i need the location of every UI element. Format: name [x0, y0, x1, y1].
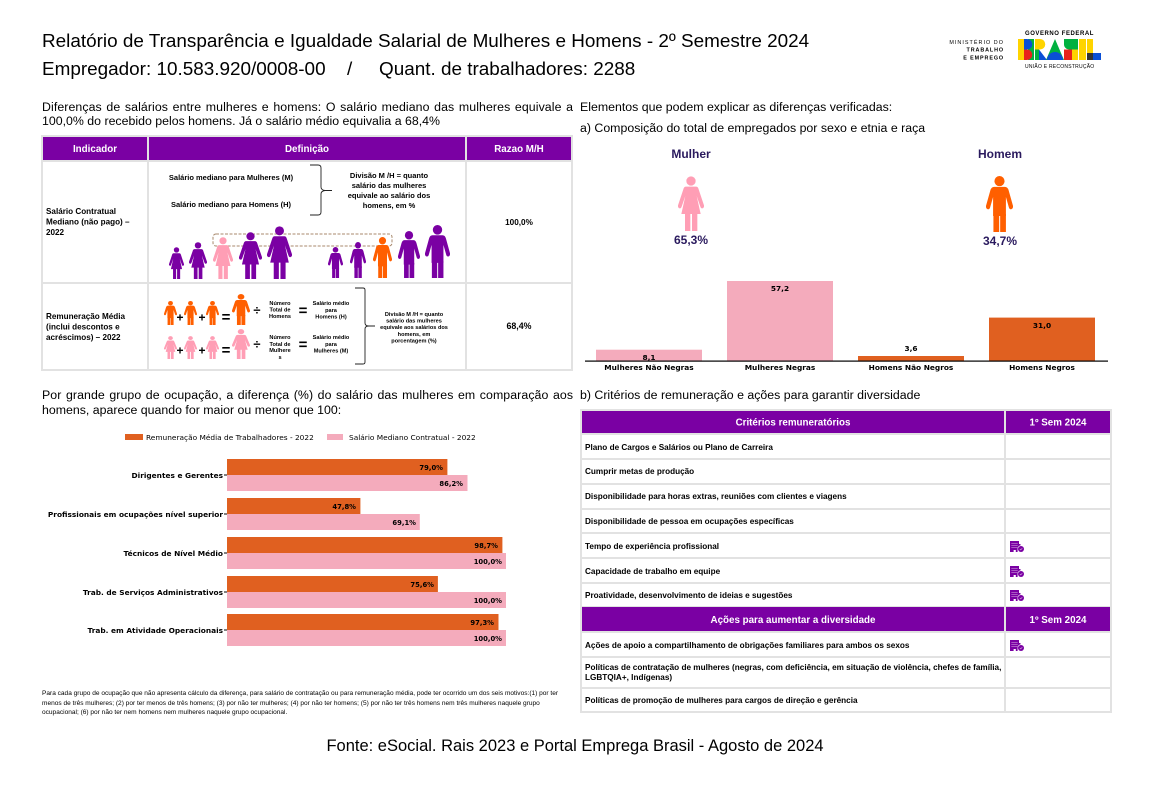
definition: salário mediano: homens, em % [363, 201, 416, 210]
bars: Atividade Operacionais [88, 614, 506, 646]
definition: divisão M/H média: homens, em [398, 332, 430, 338]
text block: elementos explicativos [580, 100, 925, 135]
panel: tabela de indicadores [41, 135, 573, 371]
row label: remuneração média: Remuneração Média [46, 312, 126, 321]
panel: tabela de critérios: Tempo de experiência profissional [585, 542, 719, 551]
definition: salário mediano: Salário mediano para Homens (H) [171, 200, 292, 209]
panel: tabela de critérios: Ações para aumentar a diversidade [710, 615, 876, 626]
bar chart: composição: 31,0 [1033, 321, 1051, 330]
formula: remuneração média mulheres: Salário médio [313, 335, 350, 341]
bars: Profissionais: Profissionais em ocupações nível superior [48, 510, 223, 519]
text block: elementos explicativos: Elementos que podem explicar as diferenças verificadas: [580, 100, 892, 114]
logo: Governo Federal Brasil: UNIÃO E RECONSTRUÇÃO [1025, 63, 1094, 70]
logo: Governo Federal Brasil: GOVERNO FEDERAL [1025, 31, 1094, 37]
bars: Atividade Operacionais: 100,0% [474, 635, 502, 643]
title: Empregador: 10.583.920/0008-00 [42, 59, 326, 80]
formula: remuneração média homens [164, 294, 350, 326]
value: razão média: 68,4% [507, 321, 532, 331]
formula: remuneração média homens: Salário médio [313, 301, 350, 307]
bar chart: composição: Mulheres Não Negras [604, 363, 694, 372]
panel: tabela de critérios: Ações de apoio a compartilhamento de obrigações familiares para ambos os sexos [585, 641, 910, 650]
bars: Profissionais [48, 498, 420, 530]
title: Relatório de Transparência e Igualdade Salarial de Mulheres e Homens - 2º Semestre 2024 [42, 31, 809, 52]
footnote: Para cada grupo de ocupação que não apresenta cálculo da diferença, para salário de contratação ou para remuneração média, pode ter ocorrido um dos seis motivos:(1) por ter [42, 690, 559, 697]
panel: tabela de critérios: Proatividade, desenvolvimento de ideias e sugestões [585, 591, 793, 600]
formula: remuneração média mulheres: para [325, 342, 338, 348]
bars: Técnicos [124, 537, 506, 569]
title [42, 31, 809, 80]
row label: remuneração média: acréscimos) – 2022 [46, 333, 121, 342]
definition: salário mediano [169, 165, 430, 215]
formula: remuneração média homens: = [222, 309, 231, 326]
icons: homens em ordem de salário [328, 225, 450, 278]
panel: tabela de critérios: Plano de Cargos e Salários ou Plano de Carreira [585, 443, 773, 452]
definition: divisão M/H média: salário das mulheres [386, 318, 442, 324]
formula: remuneração média homens: para [325, 308, 338, 314]
formula: remuneração média homens: Homens [269, 314, 291, 320]
bar chart: composição: 3,6 [904, 344, 918, 353]
heading: critérios: b) Critérios de remuneração e ações para garantir diversidade [580, 388, 920, 402]
bars: Técnicos: 100,0% [474, 558, 502, 566]
source: Fonte: eSocial. Rais 2023 e Portal Emprega Brasil - Agosto de 2024 [326, 737, 824, 755]
value: razão mediana: 100,0% [505, 218, 534, 227]
formula: remuneração média homens: = [299, 302, 308, 320]
panel: homem: 34,7% [983, 234, 1017, 248]
bars: Dirigentes e Gerentes: Dirigentes e Gerentes [132, 471, 224, 480]
formula: remuneração média mulheres: + [198, 344, 206, 358]
footnote [42, 690, 559, 716]
bars: Profissionais: 69,1% [392, 519, 416, 527]
bars: Serviços Administrativos: Trab. de Serviços Administrativos [83, 588, 224, 597]
text block: grande grupo de ocupação: Por grande grupo de ocupação, a diferença (%) do salário das mulheres em comparação aos [42, 388, 573, 402]
panel: tabela de critérios: LGBTQIA+, Indígenas) [585, 673, 672, 682]
panel: tabela de critérios: Disponibilidade para horas extras, reuniões com clientes e viagens [585, 492, 847, 501]
title: Quant. de trabalhadores: 2288 [379, 59, 635, 80]
text block: grande grupo de ocupação [42, 388, 573, 417]
panel: tabela de critérios: Capacidade de trabalho em equipe [585, 567, 721, 576]
panel: tabela de critérios: Políticas de promoção de mulheres para cargos de direção e gerência [585, 696, 858, 705]
definition: divisão M/H média: Divisão M /H = quanto [385, 312, 444, 318]
text block: diferenças de salários: 100,0% do recebido pelos homens. Já o salário médio equivalia a 68,4% [42, 114, 440, 128]
bars: Técnicos: Técnicos de Nível Médio [124, 549, 223, 558]
panel: tabela de critérios: Políticas de contratação de mulheres (negras, com deficiência, em situação de violência, chefes de família, [585, 663, 1001, 672]
formula: remuneração média mulheres [164, 329, 350, 361]
bar chart: composição: Homens Não Negros [869, 363, 954, 372]
icon: selo empresa [1010, 541, 1024, 552]
icons: mulheres em ordem de salário [169, 226, 292, 279]
bars: Profissionais: 47,8% [332, 503, 356, 511]
bars: Serviços Administrativos: 75,6% [410, 581, 434, 589]
legend [125, 433, 476, 442]
bars: Atividade Operacionais: Trab. em Atividade Operacionais [88, 626, 224, 635]
formula: remuneração média mulheres: Mulheres (M) [314, 348, 348, 354]
formula: remuneração média homens: Total de [269, 308, 291, 314]
title: / [347, 59, 353, 80]
row label: salário contratual: Salário Contratual [46, 207, 116, 216]
bar chart: composição: Homens Negros [1009, 363, 1076, 372]
formula: remuneração média mulheres: Mulhere [269, 348, 291, 354]
panel: tabela de critérios: Cumprir metas de produção [585, 467, 694, 476]
panel: tabela de critérios [580, 409, 1112, 713]
formula: remuneração média homens: Homens (H) [315, 314, 347, 320]
definition: divisão M/H média: equivale aos salários dos [380, 325, 448, 331]
row label: salário contratual: Mediano (não pago) – [46, 218, 130, 226]
formula: remuneração média homens: ÷ [253, 302, 261, 318]
row label: remuneração média [46, 312, 126, 342]
formula: remuneração média homens: + [198, 310, 206, 324]
formula: remuneração média mulheres: = [222, 342, 231, 359]
formula: remuneração média mulheres: ÷ [253, 336, 261, 352]
icon: selo empresa [1010, 590, 1024, 601]
text block: grande grupo de ocupação: homens, aparece quando for maior ou menor que 100: [42, 403, 341, 417]
panel: homem [978, 147, 1022, 248]
panel: tabela de indicadores: Indicador [73, 144, 117, 155]
legend: Salário Mediano Contratual - 2022 [349, 433, 476, 442]
bars: Atividade Operacionais: 97,3% [470, 619, 494, 627]
row label: salário contratual: 2022 [46, 228, 65, 237]
bar chart: composição [585, 281, 1108, 372]
row label: remuneração média: (inclui descontos e [46, 322, 120, 332]
panel: tabela de indicadores: Razao M/H [494, 144, 544, 155]
formula: remuneração média mulheres: s [278, 355, 282, 361]
formula: remuneração média homens: Número [269, 301, 291, 307]
bar chart: ocupação [48, 433, 506, 646]
logo: Ministério do Trabalho e Emprego: MINISTÉRIO DO [949, 39, 1004, 46]
panel: homem: Homem [978, 147, 1022, 161]
icon: selo empresa [1010, 566, 1024, 577]
text block: elementos explicativos: a) Composição do total de empregados por sexo e etnia e raça [580, 121, 925, 135]
row label: salário contratual [46, 207, 130, 237]
bars: Dirigentes e Gerentes: 86,2% [439, 480, 463, 488]
icon: selo empresa [1010, 640, 1024, 651]
formula: remuneração média mulheres: = [299, 336, 308, 354]
legend: Remuneração Média de Trabalhadores - 2022 [146, 433, 314, 442]
panel: tabela de critérios: Disponibilidade de pessoa em ocupações específicas [585, 517, 794, 526]
definition: salário mediano: Salário mediano para Mulheres (M) [169, 173, 294, 182]
bar chart: composição: 8,1 [642, 353, 656, 362]
definition: divisão M/H média: porcentagem (%) [391, 338, 437, 344]
formula: remuneração média homens: + [176, 310, 184, 324]
bars: Serviços Administrativos: 100,0% [474, 597, 502, 605]
definition: salário mediano: equivale ao salário dos [348, 191, 430, 200]
logo: Governo Federal Brasil [1018, 31, 1101, 70]
panel: tabela de critérios: 1º Sem 2024 [1030, 615, 1087, 626]
bars: Dirigentes e Gerentes [132, 459, 468, 491]
formula: remuneração média mulheres: Total de [269, 342, 291, 348]
definition: divisão M/H média [355, 288, 448, 364]
panel: mulher [671, 147, 711, 247]
panel: mulher: 65,3% [674, 233, 708, 247]
panel: mulher: Mulher [671, 147, 711, 161]
logo: Ministério do Trabalho e Emprego: E EMPREGO [963, 56, 1004, 62]
bar chart: composição: 57,2 [771, 284, 789, 293]
formula: remuneração média mulheres: + [176, 344, 184, 358]
bar chart: composição: Mulheres Negras [745, 363, 816, 372]
bars: Dirigentes e Gerentes: 79,0% [419, 464, 443, 472]
footnote: menos de três mulheres; (2) por ter menos de três homens; (3) por não ter mulheres; (4) por não ter homens; (5) por não ter três homens nem três mulheres naquele grupo [42, 700, 540, 707]
panel: tabela de indicadores: Definição [285, 144, 329, 155]
bars: Técnicos: 98,7% [474, 542, 498, 550]
definition: salário mediano: Divisão M /H = quanto [350, 171, 428, 180]
panel: tabela de critérios: 1º Sem 2024 [1030, 418, 1087, 428]
bars: Serviços Administrativos [83, 576, 506, 608]
dashed highlight [213, 234, 392, 246]
logo: Ministério do Trabalho e Emprego [949, 39, 1004, 62]
text block: diferenças de salários: Diferenças de salários entre mulheres e homens: O salário mediano das mulheres equivale a [42, 100, 573, 114]
formula: remuneração média mulheres: Número [269, 335, 291, 341]
panel: tabela de critérios: Critérios remuneratórios [736, 418, 851, 428]
text block: diferenças de salários [42, 100, 573, 128]
footnote: ocupacional; (6) por não ter nem homens nem mulheres naquele grupo ocupacional. [42, 709, 287, 716]
logo: Ministério do Trabalho e Emprego: TRABALHO [967, 48, 1004, 54]
definition: salário mediano: salário das mulheres [352, 181, 426, 190]
